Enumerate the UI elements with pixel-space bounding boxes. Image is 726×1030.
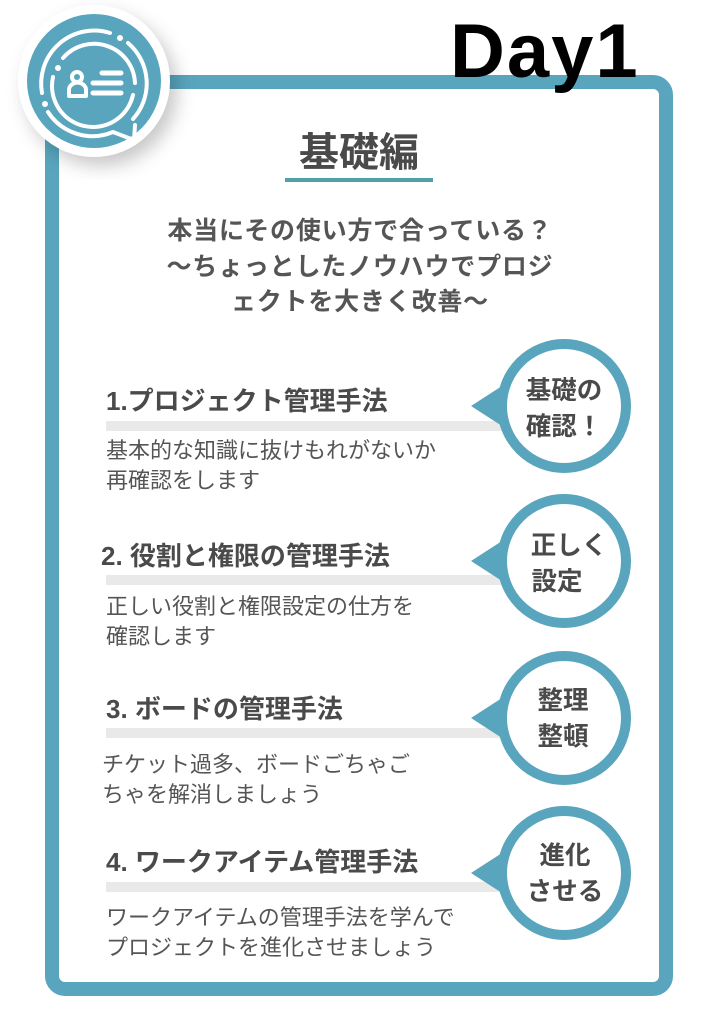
- item 1 callout: [471, 339, 631, 473]
- item 3 text: チケット過多、ボードごちゃご: [102, 752, 410, 777]
- heading: Day1: Day1: [450, 9, 640, 94]
- subtitle: ェクトを大きく改善～: [231, 288, 489, 316]
- item 2 callout: [471, 494, 631, 628]
- item 1 text: 基本的な知識に抜けもれがないか: [106, 438, 436, 463]
- heading: 基礎編: 基礎編: [299, 131, 419, 175]
- item 3 bar: [106, 728, 506, 738]
- item 2 callout text: [531, 532, 607, 596]
- item 1 callout text: 確認！: [526, 413, 602, 441]
- item 3 text: ちゃを解消しましょう: [102, 782, 322, 807]
- item 2 text: 確認します: [106, 624, 216, 649]
- subtitle: [166, 217, 554, 316]
- item 2 heading: 2. 役割と権限の管理手法: [101, 541, 390, 571]
- item 4 callout text: させる: [527, 878, 603, 906]
- item 1 bar: [106, 421, 506, 431]
- item 2 bar: [106, 575, 506, 585]
- item 3 callout: [471, 651, 631, 785]
- item 3 callout text: [537, 687, 588, 751]
- item 3 callout text: 整頓: [537, 723, 588, 751]
- item 4 bar: [106, 882, 506, 892]
- item 3 heading: 3. ボードの管理手法: [106, 694, 343, 724]
- icon: badge with profile speech bubble: [16, 6, 186, 174]
- item 4 callout text: 進化: [539, 842, 590, 870]
- item 2 callout text: 正しく: [531, 532, 607, 560]
- heading underline: [285, 178, 433, 182]
- panel: main frame: [45, 75, 673, 996]
- item 1 heading: 1.プロジェクト管理手法: [106, 386, 388, 416]
- item 4 text: プロジェクトを進化させましょう: [106, 935, 436, 960]
- item 4 text: [106, 905, 455, 960]
- item 4 heading: 4. ワークアイテム管理手法: [106, 847, 418, 877]
- item 1 callout text: [526, 377, 602, 441]
- subtitle: 本当にその使い方で合っている？: [167, 217, 553, 245]
- item 3 callout text: 整理: [537, 687, 588, 715]
- item 4 text: ワークアイテムの管理手法を学んで: [106, 905, 455, 930]
- item 2 callout text: 設定: [531, 568, 582, 596]
- item 4 callout text: [527, 842, 603, 906]
- item 4 callout: [471, 806, 631, 940]
- item 1 text: 再確認をします: [106, 468, 260, 493]
- subtitle: ～ちょっとしたノウハウでプロジ: [166, 252, 554, 280]
- item 3 text: [102, 752, 410, 807]
- item 2 text: 正しい役割と権限設定の仕方を: [106, 594, 414, 619]
- item 2 text: [106, 594, 414, 649]
- item 1 text: [106, 438, 436, 493]
- item 1 callout text: 基礎の: [526, 377, 602, 405]
